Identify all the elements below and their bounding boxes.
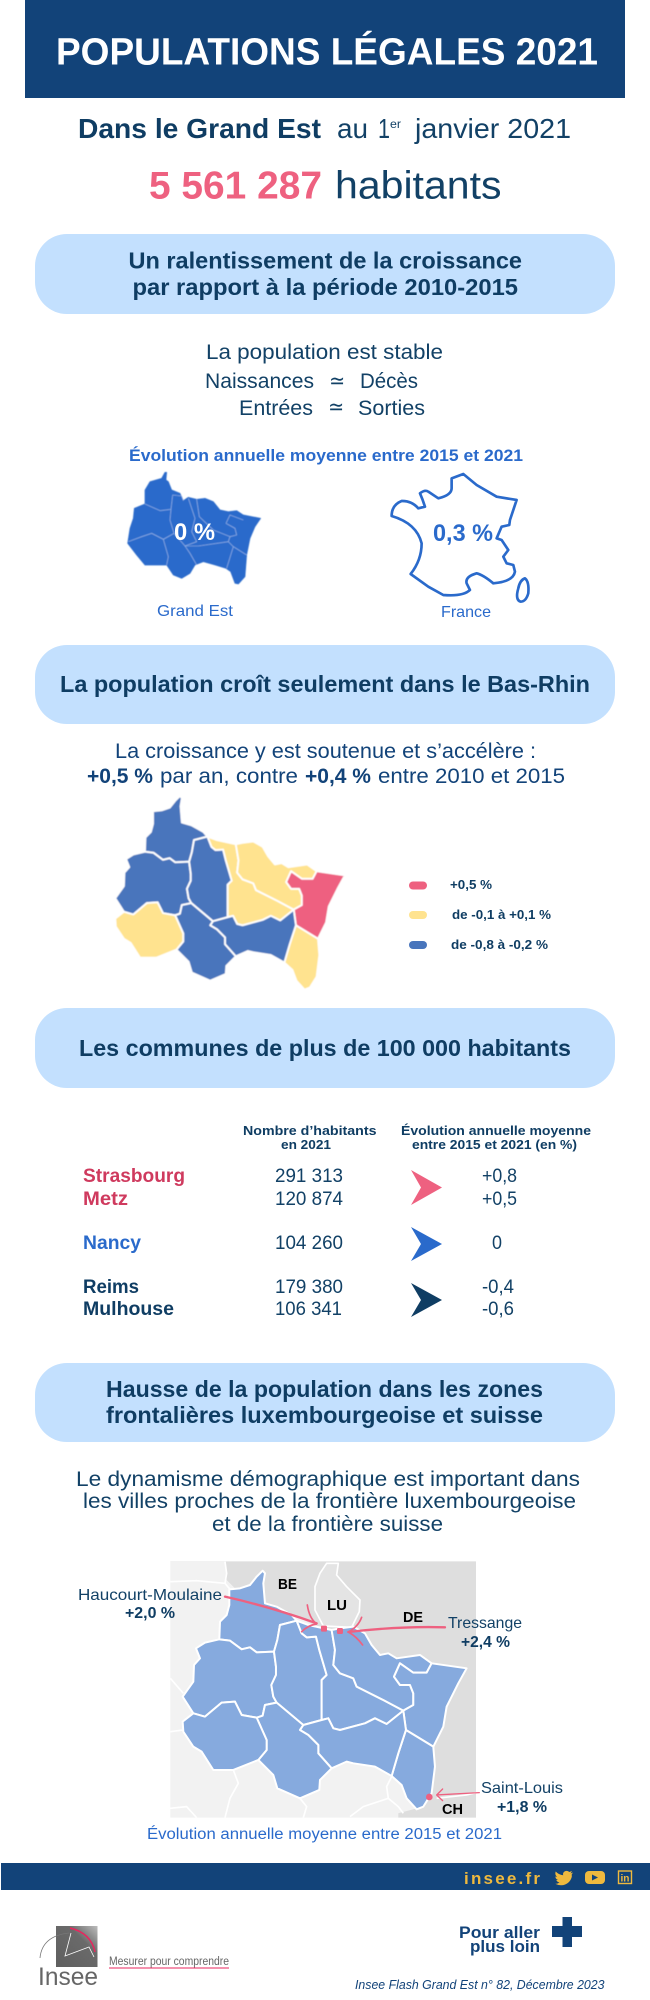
map: France 0,3 %: 0,3 %	[433, 520, 493, 547]
heading pill: Bas-Rhin	[35, 645, 615, 724]
footer bar	[1, 1863, 650, 1890]
callout: Saint-Louis	[481, 1780, 563, 1816]
heading pill: communes	[35, 1008, 615, 1088]
callout: Haucourt-Moulaine: Haucourt-Moulaine	[78, 1587, 222, 1604]
footer bar: insee.fr	[464, 1869, 540, 1888]
heading pill: ralentissement	[35, 234, 615, 314]
row group: Reims and Mulhouse: Mulhouse	[83, 1298, 174, 1320]
row: Nancy: 104 260	[275, 1232, 343, 1254]
title banner	[25, 0, 625, 98]
subtitle: date line: au	[337, 113, 368, 144]
country labels: CH	[442, 1802, 463, 1818]
icon: linkedin	[618, 1871, 632, 1884]
total population: 5 561 287	[149, 164, 322, 208]
logo: Insee: Insee	[38, 1963, 98, 1991]
source note: Insee Flash Grand Est n° 82, Décembre 2023	[355, 1977, 605, 1992]
row group: Reims and Mulhouse: 179 380	[275, 1276, 343, 1298]
row group: Strasbourg and Metz	[83, 1165, 517, 1210]
table headers: entre 2015 et 2021 (en %)	[412, 1137, 577, 1152]
heading pill: communes: Les communes de plus de 100 000 habitants	[79, 1035, 571, 1061]
row group: Strasbourg and Metz: 291 313	[275, 1165, 343, 1187]
text block: croissance Bas-Rhin: entre 2010 et 2015	[378, 764, 565, 788]
heading pill: zones frontalières: Hausse de la population dans les zones	[106, 1376, 543, 1402]
table headers: Évolution annuelle moyenne	[401, 1123, 591, 1138]
map: France 0,3 %	[392, 474, 528, 621]
callout: Haucourt-Moulaine	[78, 1587, 222, 1622]
text block: population stable: Entrées	[239, 396, 313, 420]
row group: Reims and Mulhouse: 106 341	[275, 1298, 342, 1320]
heading pill: Bas-Rhin: La population croît seulement dans le Bas-Rhin	[60, 671, 590, 697]
row: Nancy: Nancy	[83, 1232, 141, 1254]
map caption: Évolution annuelle moyenne entre 2015 et 2021	[147, 1826, 502, 1843]
text block: population stable	[205, 340, 443, 420]
map: zones frontalières	[78, 1561, 563, 1818]
row group: Strasbourg and Metz: 120 874	[275, 1188, 343, 1210]
subtitle: date line: er	[390, 117, 401, 131]
row: Nancy	[83, 1227, 502, 1261]
row group: Strasbourg and Metz: +0,5	[482, 1188, 517, 1210]
callout: Haucourt-Moulaine: +2,0 %	[125, 1605, 175, 1622]
country labels	[278, 1577, 463, 1818]
callout: Tressange: Tressange	[448, 1615, 522, 1632]
row group: Strasbourg and Metz: Strasbourg	[83, 1165, 185, 1187]
text block: population stable: ≃	[328, 395, 344, 420]
table: communes de plus de 100 000 habitants	[83, 1123, 591, 1320]
legend: map Bas-Rhin	[409, 878, 551, 952]
country labels: BE	[278, 1577, 297, 1593]
text block: dynamisme démographique: Le dynamisme démographique est important dans	[76, 1467, 580, 1491]
row group: Reims and Mulhouse	[83, 1276, 514, 1320]
text block: population stable: Décès	[360, 369, 418, 393]
total population: habitants	[335, 164, 502, 208]
table headers	[243, 1123, 591, 1152]
subtitle: date line: Dans le Grand Est	[78, 113, 321, 144]
map: France 0,3 %: France	[441, 604, 491, 621]
legend: map Bas-Rhin: +0,5 %	[450, 878, 492, 892]
text block: croissance Bas-Rhin: La croissance y est soutenue et s’accélère :	[115, 739, 536, 763]
table headers: Nombre d’habitants	[243, 1123, 376, 1138]
subtitle: date line	[78, 113, 571, 144]
icon: plus	[552, 1917, 582, 1947]
legend: map Bas-Rhin: de -0,8 à -0,2 %	[451, 938, 548, 952]
logo: Insee	[38, 1926, 229, 1991]
icon: youtube	[585, 1871, 605, 1884]
text block: population stable: La population est stable	[206, 340, 443, 364]
text block: population stable: Naissances	[205, 369, 314, 393]
country labels: LU	[327, 1598, 347, 1614]
row group: Reims and Mulhouse: Reims	[83, 1276, 139, 1298]
row group: Strasbourg and Metz: +0,8	[482, 1165, 517, 1187]
logo: Insee: Mesurer pour comprendre	[109, 1956, 229, 1968]
link: pour aller plus loin: plus loin	[470, 1937, 540, 1956]
heading pill: ralentissement: Un ralentissement de la croissance	[128, 248, 522, 274]
text block: croissance Bas-Rhin: +0,4 %	[305, 764, 371, 788]
row group: Reims and Mulhouse: -0,4	[482, 1276, 514, 1298]
map: Grand Est 0 %: Grand Est	[157, 603, 234, 620]
subtitle: date line: janvier 2021	[414, 113, 571, 144]
text block: dynamisme démographique: et de la frontière suisse	[212, 1512, 443, 1536]
text block: croissance Bas-Rhin: par an, contre	[160, 764, 298, 788]
text block: population stable: ≃	[329, 369, 345, 394]
heading pill: zones frontalières	[35, 1363, 615, 1442]
text block: dynamisme démographique: les villes proches de la frontière luxembourgeoise	[83, 1489, 576, 1513]
link: pour aller plus loin: Pour aller	[459, 1923, 540, 1942]
text block: croissance Bas-Rhin	[87, 739, 565, 788]
text block: croissance Bas-Rhin: +0,5 %	[87, 764, 153, 788]
callout: Saint-Louis: +1,8 %	[497, 1799, 547, 1816]
country labels: DE	[403, 1610, 423, 1626]
icon: linkedin: in	[620, 1872, 630, 1884]
callout: Tressange	[448, 1615, 522, 1651]
icon: twitter	[555, 1871, 573, 1885]
title banner: POPULATIONS LÉGALES 2021	[56, 30, 598, 74]
subtitle: date line: 1	[378, 113, 390, 144]
row group: Strasbourg and Metz: Metz	[83, 1188, 128, 1210]
total population	[149, 164, 502, 208]
legend: map Bas-Rhin: de -0,1 à +0,1 %	[452, 908, 551, 922]
link: pour aller plus loin	[459, 1917, 582, 1956]
callout: Saint-Louis: Saint-Louis	[481, 1780, 563, 1797]
heading pill: ralentissement: par rapport à la période 2010-2015	[132, 274, 518, 300]
table headers: en 2021	[281, 1137, 331, 1152]
map: Grand Est 0 %	[128, 472, 261, 620]
row: Nancy: 0	[492, 1232, 502, 1254]
heading pill: zones frontalières: frontalières luxembourgeoise et suisse	[106, 1402, 543, 1428]
row group: Reims and Mulhouse: -0,6	[482, 1298, 514, 1320]
map: Grand Est 0 %: 0 %	[174, 519, 215, 546]
text block: population stable: Sorties	[358, 396, 425, 420]
map: départements Grand Est	[115, 796, 345, 990]
text block: dynamisme démographique	[76, 1467, 580, 1536]
chart heading: évolution annuelle: Évolution annuelle moyenne entre 2015 et 2021	[129, 446, 523, 465]
callout: Tressange: +2,4 %	[461, 1634, 510, 1651]
markers and arrows	[225, 1597, 479, 1801]
